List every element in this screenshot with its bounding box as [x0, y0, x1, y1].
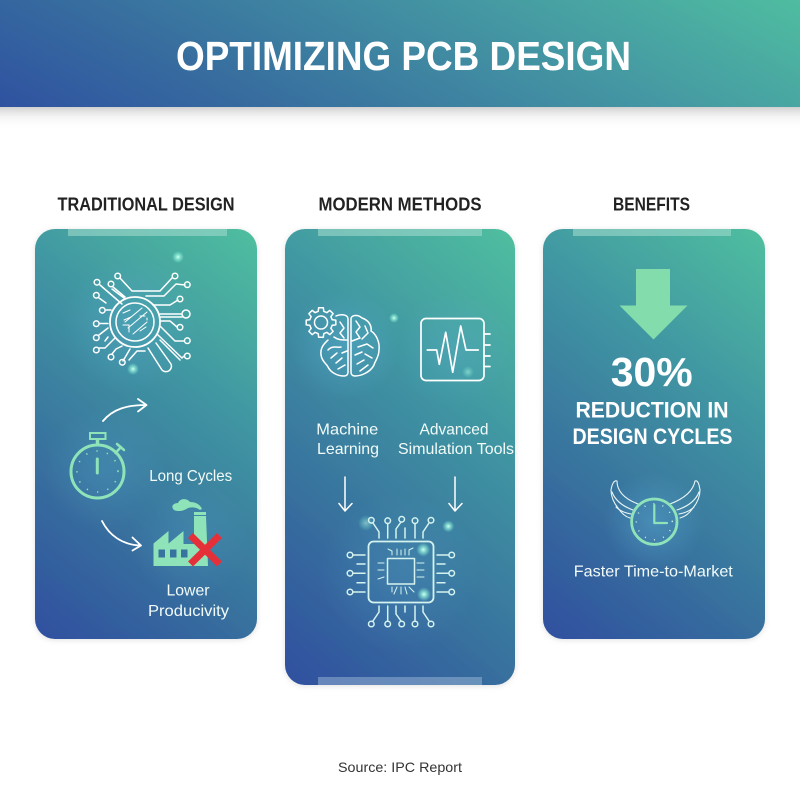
- arrow: machine learning to chip: [339, 477, 352, 511]
- heading: traditional design: TRADITIONAL DESIGN: [58, 194, 234, 214]
- source note: Source: IPC Report: [338, 759, 462, 775]
- label: advanced simulation tools: Advanced: [420, 422, 488, 438]
- panel: modern methods: [285, 229, 515, 685]
- arrow: to stopwatch: [103, 399, 146, 421]
- text: reduction in design cycles: DESIGN CYCLES: [572, 424, 732, 449]
- label: lower productivity: Producivity: [148, 603, 229, 620]
- icon: winged clock: [611, 481, 700, 544]
- arrow: to factory: [102, 521, 141, 550]
- header banner: [0, 0, 800, 131]
- text: reduction in design cycles: [572, 398, 732, 449]
- icon: brain with gear: [306, 308, 379, 376]
- text: reduction in design cycles: REDUCTION IN: [576, 398, 728, 422]
- heading: benefits: BENEFITS: [613, 194, 690, 214]
- label: long cycles: Long Cycles: [149, 468, 232, 485]
- title: OPTIMIZING PCB DESIGN: [176, 33, 631, 79]
- icon: big down arrow: [620, 269, 688, 340]
- label: advanced simulation tools: [398, 422, 514, 458]
- label: machine learning: Learning: [317, 441, 379, 458]
- arrow: simulation to chip: [449, 477, 462, 511]
- label: lower productivity: [148, 582, 229, 620]
- icon: stopwatch: [71, 433, 124, 498]
- label: advanced simulation tools: Simulation Tools: [398, 441, 514, 458]
- icon: factory with red cross: [154, 499, 220, 566]
- icon: microchip: [347, 515, 455, 627]
- icon: circuit magnifier: [94, 273, 190, 372]
- label: machine learning: [316, 422, 379, 458]
- label: lower productivity: Lower: [166, 582, 210, 600]
- label: machine learning: Machine: [316, 422, 378, 438]
- label: faster time-to-market: Faster Time-to-Market: [574, 564, 733, 581]
- icon: simulation waveform: [421, 318, 490, 380]
- panel: benefits: [543, 229, 765, 639]
- panel: traditional design: [35, 229, 257, 639]
- stat: 30%: 30%: [611, 349, 693, 395]
- heading: modern methods: MODERN METHODS: [318, 194, 482, 214]
